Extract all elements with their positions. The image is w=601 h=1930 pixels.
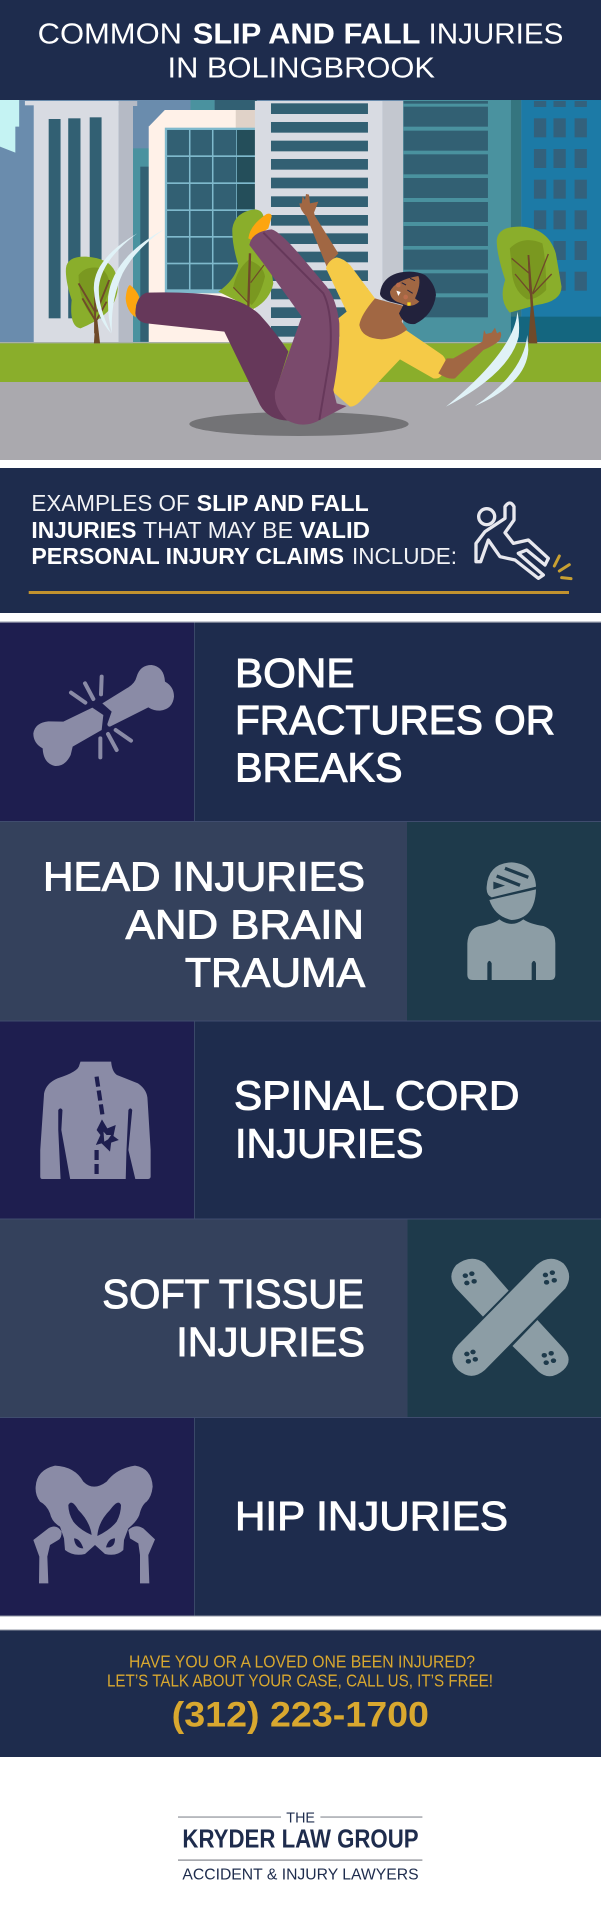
building: cream tower — [149, 110, 257, 343]
label: spinal cord injuries: INJURIES — [235, 1121, 424, 1167]
label: spinal cord injuries: SPINAL CORD — [234, 1072, 519, 1118]
intro text: INCLUDE: — [352, 543, 457, 569]
icon: bandaged head — [467, 862, 555, 980]
label: bone fractures — [235, 650, 555, 791]
icon: injured back — [40, 1062, 151, 1179]
logo: The Kryder Law Group: ACCIDENT & INJURY LAWYERS — [182, 1866, 419, 1883]
intro text: THAT MAY BE — [143, 517, 293, 543]
tree: left — [66, 257, 118, 343]
title: SLIP AND FALL — [193, 18, 420, 50]
panel: hip injuries — [0, 1417, 601, 1616]
phone number: (312) 223-1700 — [172, 1696, 429, 1735]
title: INJURIES — [428, 18, 563, 50]
pavement — [0, 382, 601, 460]
label: bone fractures: BONE — [235, 650, 354, 696]
icon: broken bone — [33, 665, 174, 766]
label: head injuries: HEAD INJURIES — [43, 854, 365, 900]
label: hip injuries: HIP INJURIES — [235, 1493, 508, 1539]
logo: The Kryder Law Group — [178, 1810, 422, 1883]
shirt — [326, 257, 446, 407]
title: IN BOLINGBROOK — [168, 53, 436, 85]
shoes — [126, 285, 139, 317]
label: soft tissue injuries: INJURIES — [176, 1319, 365, 1365]
building: teal tower — [403, 100, 521, 343]
building: left white tower — [25, 101, 137, 343]
intro text: EXAMPLES OF — [31, 490, 190, 516]
building: striped white tower — [255, 101, 403, 343]
far leg — [135, 292, 288, 421]
motion swooshes: left — [94, 229, 164, 333]
hair — [380, 272, 436, 324]
intro text: PERSONAL INJURY CLAIMS — [31, 543, 344, 569]
lowered arm — [438, 328, 501, 379]
label: bone fractures: FRACTURES OR — [235, 697, 555, 743]
logo: The Kryder Law Group: THE — [286, 1810, 315, 1827]
label: head injuries — [43, 854, 366, 996]
tree and swooshes on the right of the figure — [446, 254, 552, 407]
gold divider — [29, 591, 569, 594]
panel: head injuries — [0, 821, 601, 1021]
panel: call to action — [0, 1630, 601, 1757]
title — [38, 18, 563, 85]
title: COMMON — [38, 18, 182, 50]
raised arm — [299, 194, 338, 267]
panel: soft tissue injuries — [0, 1218, 601, 1418]
label: soft tissue injuries: SOFT TISSUE — [102, 1271, 364, 1317]
call to action text: LET’S TALK ABOUT YOUR CASE, CALL US, IT’S FREE! — [107, 1671, 493, 1691]
call to action text — [107, 1652, 493, 1691]
panel: spinal cord injuries — [0, 1020, 601, 1219]
shadow under figure — [189, 412, 409, 436]
building: blue tower — [511, 100, 601, 343]
face — [390, 276, 419, 306]
label: spinal cord injuries — [234, 1072, 519, 1167]
label: head injuries: TRAUMA — [185, 950, 366, 996]
panel: intro banner — [0, 468, 601, 613]
near leg — [249, 229, 347, 425]
label: soft tissue injuries — [102, 1271, 365, 1365]
neck and chest — [359, 298, 407, 339]
icon: pelvis — [33, 1466, 155, 1583]
intro text: SLIP AND FALL — [197, 490, 369, 516]
panel: bone fractures — [0, 621, 601, 822]
grass strip — [0, 343, 601, 382]
logo: The Kryder Law Group: KRYDER LAW GROUP — [182, 1823, 419, 1853]
intro text: VALID — [300, 517, 370, 543]
call to action text: HAVE YOU OR A LOVED ONE BEEN INJURED? — [129, 1652, 475, 1672]
icon: crossed bandages — [451, 1259, 569, 1376]
intro text: INJURIES — [31, 517, 136, 543]
intro text — [31, 490, 457, 569]
figure: head and lowered arm — [380, 272, 501, 379]
illustration: woman slipping in front of city buildings — [0, 100, 601, 460]
figure: falling woman, legs and torso — [126, 194, 446, 425]
label: head injuries: AND BRAIN — [126, 902, 364, 948]
header panel — [0, 0, 601, 100]
label: bone fractures: BREAKS — [235, 745, 402, 791]
tree: right — [497, 227, 562, 313]
tree: behind the raised leg — [218, 209, 273, 309]
icon: slipping person — [476, 503, 571, 579]
